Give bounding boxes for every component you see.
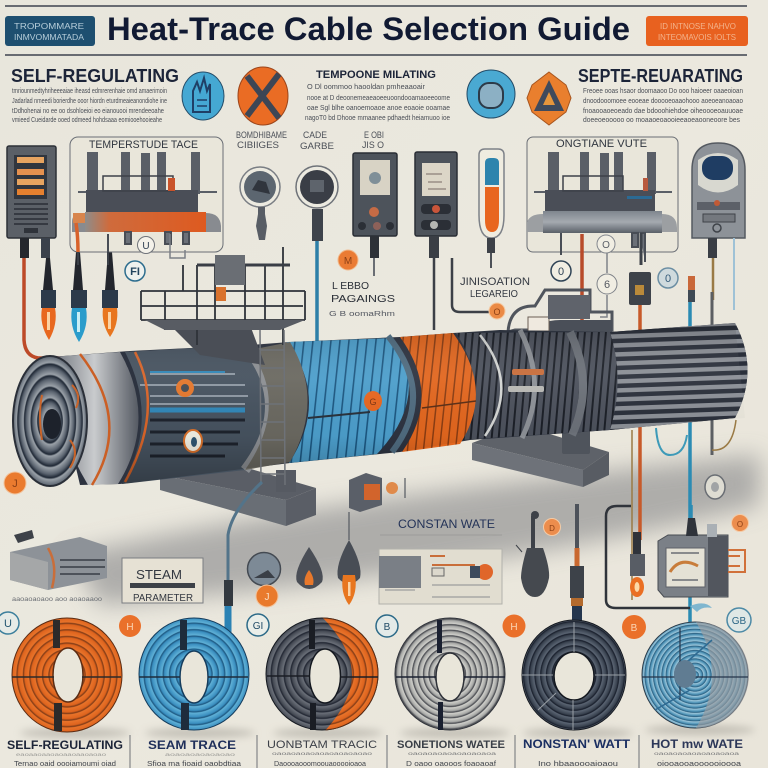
- label: sonetions wate: oaoaoaoaoaoaoaoaoa: [408, 751, 497, 756]
- panel: constant watt plant: [527, 137, 678, 262]
- pipe shading: [122, 323, 745, 484]
- panel: self-regulating intro: SELF-REGULATING: [11, 66, 179, 86]
- main pipe: [13, 323, 748, 526]
- callout: lead packaging: L EBBO: [332, 280, 369, 292]
- pipe end face: [13, 356, 87, 486]
- label: seam trace: Sfioa ma fioaid oaobdtiaa: [147, 761, 241, 768]
- callout: insulation legend: JINISOATION: [460, 276, 530, 288]
- heading: constant watt: CONSTAN WATE: [398, 517, 495, 531]
- coil: orange self-regulating: [12, 618, 122, 732]
- wires from plant to probes: [78, 252, 108, 265]
- coil markers: [0, 608, 751, 639]
- panel: self-regulating right intro: Freoee ooas hsaor doomaaoo Do ooo haioeer oaaeoioan: [583, 88, 743, 95]
- marker: coil five: H: [510, 622, 518, 633]
- callout marker u: U: [142, 241, 150, 252]
- label: constam tracing: oaoaoaoaoaoaoaoaoaoao: [272, 751, 373, 756]
- callout: steam parameter box: STEAM: [136, 567, 182, 582]
- callout marker blue: 0: [665, 273, 671, 285]
- icon: flame drop with bulb: [337, 540, 361, 605]
- callout marker blue: [658, 268, 678, 288]
- badge: left header tag: INMVOMMATADA: [14, 32, 84, 42]
- label: constam tracing: [267, 739, 377, 768]
- panel: temperature heating intro: O Dl oommoo haooldan pmheaaoair: [307, 84, 426, 91]
- label: self-regulating: eaoaaoaaoaoaaoaaoaoao: [16, 752, 107, 757]
- icon: glowing bulb connector: [630, 532, 645, 597]
- callout: steam parameter box: [122, 558, 203, 604]
- wire: red plant cable: [580, 234, 584, 345]
- icon: orange warning badge: [527, 72, 571, 125]
- coil: navy nonstan watt: [522, 620, 626, 730]
- wire: left red cable: [24, 258, 100, 358]
- callout: insulation legend: LEGAREIO: [470, 289, 518, 300]
- panel: self-regulating intro: [11, 66, 179, 124]
- icon: arched right gauge device: [692, 143, 745, 258]
- panel: self-regulating intro: tmriounmedtyhriheeeaiae iheasd edmrerenhaie omd amaerimoin: [12, 88, 167, 95]
- label: constam tracing: Daoooaooomoouaooooioaoa: [274, 761, 366, 768]
- panel: self-regulating right intro: [578, 66, 743, 124]
- panel: self-regulating right intro: fnoaooaoeoeado dae bdooohiehdoe oiheoooeoauuoae: [583, 108, 743, 115]
- label: sonetions wate: SONETIONS WATEE: [397, 739, 505, 751]
- panel: self-regulating right intro: doeeoeooooo oo moaaoeoaooieeaoeaooneoore bes: [583, 117, 740, 124]
- callout: lead packaging: M: [344, 256, 352, 267]
- coil shadows: [20, 725, 755, 738]
- section: silver end ring: [50, 352, 139, 485]
- callout: small orange marker: D: [549, 524, 555, 533]
- section: orange wound cable: [400, 333, 476, 452]
- label: self-regulating: [7, 740, 123, 768]
- platform structure: [141, 247, 305, 485]
- label: gauge captions left: JIS O: [362, 140, 384, 150]
- wire: right lead and loops: [632, 238, 736, 625]
- label: gauge captions left: CIBIIGES: [237, 140, 279, 150]
- callout marker zero: 0: [558, 266, 564, 278]
- marker: coil six: [622, 615, 646, 639]
- icon: heater machine: [10, 530, 107, 603]
- label: self-regulating: SELF-REGULATING: [7, 740, 123, 752]
- callout: insulation legend: [460, 276, 530, 319]
- marker: coil six: B: [631, 623, 638, 634]
- badge: right header tag: INTEOMAVOIS IOLTS: [658, 32, 736, 42]
- coil: blue steam trace: [139, 618, 249, 730]
- icon: thermometer gauge: [479, 149, 504, 268]
- icon: left control panel: [7, 146, 56, 258]
- panel: temperature trace plant: [70, 137, 223, 258]
- wire: blue gauge cable: [315, 241, 319, 344]
- orange heat pipe: [72, 213, 221, 232]
- marker: coil seven: [727, 608, 751, 632]
- panel: constant watt schematic: [379, 549, 502, 604]
- badge: right header tag: [646, 16, 748, 46]
- callout: right orange marker: [732, 514, 748, 532]
- right support block: [472, 425, 609, 487]
- marker: coil seven: GB: [732, 616, 747, 627]
- callout: right orange marker: O: [737, 520, 743, 529]
- label: nonstan watt: [523, 737, 631, 768]
- label: seam trace: [147, 740, 241, 768]
- marker: coil two: [119, 615, 141, 637]
- callout marker zero: [551, 261, 571, 281]
- plant stacks: [534, 152, 672, 212]
- title: Heat-Trace Cable Selection Guide: [107, 11, 630, 47]
- panel: temperature heating intro: TEMPOONE MILATING: [316, 69, 436, 81]
- panel: temperature heating intro: oae Sgl blhe oanoemoaoe anoe eoaoie ooamae: [307, 105, 450, 112]
- callout: lead packaging: PAGAINGS: [331, 293, 395, 305]
- callout marker u: [138, 236, 154, 254]
- icon: meter device: [353, 153, 397, 276]
- panel: self-regulating intro: Jadarlad nmeedi borierdhe ooor hiordn eturdmeaieanondiohe ine: [12, 98, 167, 105]
- label: hot watte: oaoaoaoaoaoaoaoaoa: [654, 751, 740, 756]
- icon: vertical connector: [570, 504, 584, 670]
- icon: orange valve box: [216, 287, 226, 301]
- label: hot watte: [651, 739, 743, 768]
- plant stacks: [78, 152, 217, 212]
- rear machinery: [508, 290, 612, 338]
- panel: self-regulating intro: vmieed Cueidarde ooed odmeed hohdsaaa eomiooehooieahe: [12, 117, 162, 124]
- coil: grey constant watt: [395, 618, 505, 730]
- marker: coil four: B: [384, 622, 391, 633]
- marker: coil one: [0, 612, 19, 634]
- marker: coil four: [376, 615, 398, 637]
- marker: coil one: U: [4, 618, 12, 630]
- label: self-regulating: Ternao oaid oooiamoumi oiad: [14, 761, 116, 768]
- callout: orange marker: J: [264, 592, 270, 603]
- callout: steam parameter box: PARAMETER: [133, 593, 193, 604]
- coil: dark and orange constant trace: [266, 618, 378, 730]
- panel: temperature heating intro: nagoT0 bd Dhooe mmaanee pdhaedt heiamuoo ioe: [305, 115, 450, 122]
- panel: self-regulating intro: tDdhohenai no ee oo dsohloeioi eo eianouooi mrendeeoahe: [12, 108, 164, 115]
- icon: flame drop: [296, 547, 323, 589]
- callout marker pipe badge: G: [369, 397, 377, 407]
- dividers: [130, 735, 639, 768]
- icon: teal wisp: [690, 603, 712, 612]
- icon: meter device two: [415, 152, 457, 258]
- icon: blue head circle: [467, 70, 515, 118]
- wire: L-shaped lead: [606, 506, 690, 608]
- callout marker o: O: [602, 240, 610, 251]
- pipe body: [50, 323, 748, 485]
- wire: steam trace cable: [224, 482, 262, 640]
- icon: small blue probe top: [688, 276, 695, 302]
- floor shadow: [70, 455, 760, 605]
- icon: plug bulb: [516, 511, 549, 597]
- label: seam trace: aoaoaoaoaoaoao: [165, 752, 236, 757]
- label: nonstan watt: Ino hbaaoooaioaou: [538, 761, 618, 768]
- section: horizontal stripes right end: [610, 323, 748, 430]
- marker: coil three: GI: [253, 621, 263, 632]
- badge: left header tag: [5, 16, 95, 46]
- icon: orange bulb probe two: [102, 252, 118, 337]
- callout: insulation legend: O: [493, 307, 501, 317]
- badge: left header tag: TROPOMMARE: [14, 21, 84, 31]
- panel: temperature heating intro: nooe at D deoonemeaeaoeeuoondooamaoeeoome: [307, 95, 450, 102]
- icon: blue bulb probe: [71, 252, 87, 342]
- icon: heater machine: aaoaoaoaoo aoo aoaoaaoo: [12, 596, 102, 603]
- marker: coil three: [247, 614, 269, 636]
- panel: temperature trace plant: TEMPERSTUDE TACE: [89, 139, 198, 151]
- label: sonetions wate: D oaoo oaooos foaoaoaf: [406, 761, 496, 768]
- label: gauge captions left: E OBI: [364, 130, 384, 140]
- wire: insulation lead: [434, 258, 490, 330]
- label: hot watte: HOT mw WATE: [651, 739, 743, 751]
- callout: lead packaging: G B oomaRhm: [329, 311, 395, 318]
- callout marker orange pipe: [176, 379, 194, 397]
- coil: blue-grey hot watt: [642, 622, 749, 728]
- callout: small orange marker: [544, 518, 560, 536]
- icon: round grey gauge: [248, 552, 280, 586]
- badge: right header tag: ID INTNOSE NAHVO: [660, 21, 736, 31]
- label: gauge captions left: GARBE: [300, 141, 334, 151]
- label: gauge captions left: CADE: [303, 130, 327, 140]
- label: hot watte: oiooaooaoooooioooa: [657, 761, 741, 768]
- label: seam trace: SEAM TRACE: [148, 740, 236, 752]
- callout: left pipe marker: J: [12, 478, 18, 490]
- icon: blue factory circle: [182, 72, 224, 120]
- label: sonetions wate: [397, 739, 505, 768]
- section: left machinery wrap: [122, 342, 308, 484]
- callout: left pipe marker: [4, 472, 26, 494]
- label: constam tracing: UONBTAM TRACIC: [267, 739, 377, 751]
- panel: constant watt plant: ONGTIANE VUTE: [556, 138, 647, 150]
- section: dark wound cable: [456, 330, 618, 440]
- marker: coil two: H: [126, 622, 134, 633]
- icon: small control unit: [349, 473, 405, 540]
- icon: orange cross circle: [238, 67, 288, 125]
- heading: constant watt: [380, 517, 502, 535]
- marker: coil five: [502, 614, 526, 638]
- icon: dial gauge two: [296, 166, 338, 241]
- icon: orange bulb probe: [41, 258, 56, 340]
- label: gauge captions left: [236, 130, 384, 151]
- section: blue wound cable: [287, 336, 413, 463]
- label: nonstan watt: NONSTAN' WATT: [523, 737, 631, 751]
- callout marker o: [597, 235, 615, 253]
- left support block: [160, 460, 316, 526]
- callout marker six: [597, 253, 617, 317]
- panel: temperature heating intro: [305, 69, 450, 122]
- callout: right pipe gauge ring: [705, 475, 725, 499]
- header band: [5, 6, 748, 55]
- callout marker fi: [125, 261, 145, 281]
- callout: lead packaging: [329, 250, 395, 318]
- icon: dial gauge one: [240, 167, 280, 240]
- grey pipe: [527, 214, 677, 232]
- callout marker white pipe: [184, 430, 202, 452]
- callout: orange marker: [256, 585, 278, 607]
- icon: power supply box: [658, 505, 745, 597]
- callout marker six: 6: [604, 279, 610, 291]
- ladder: [260, 330, 285, 485]
- callout marker fi: FI: [130, 266, 140, 278]
- panel: self-regulating right intro: dnoodooomoee eooeae dooooeoaaohooo aoeoeanoaoao: [583, 98, 743, 105]
- label: gauge captions left: BOMDHIBAME: [236, 130, 287, 140]
- wire: orange junction box and cable: [629, 233, 651, 540]
- panel: self-regulating right intro: SEPTE-REUARATING: [578, 66, 743, 86]
